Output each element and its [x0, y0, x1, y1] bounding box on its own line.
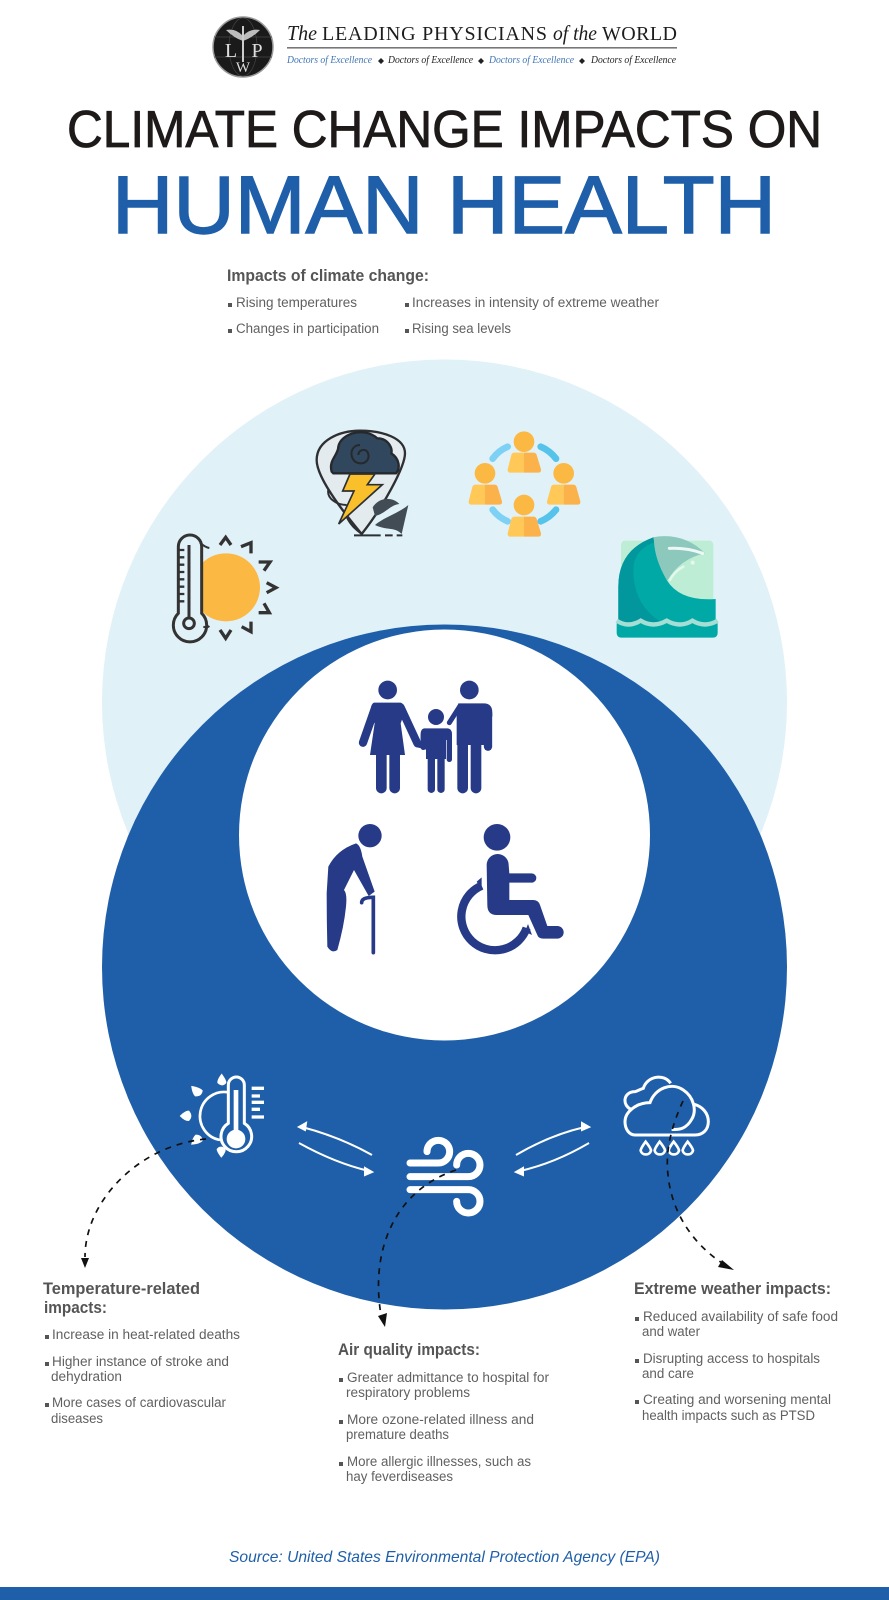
text block: extreme weather impacts: Creating and worsening mental	[643, 1392, 831, 1407]
text block: impacts of climate change: Increases in intensity of extreme weather	[412, 295, 659, 310]
top person	[508, 431, 541, 473]
text block: extreme weather impacts: and water	[642, 1324, 700, 1339]
icon: LPW round emblem	[213, 17, 273, 77]
text block: temperature-related impacts: dehydration	[51, 1369, 122, 1384]
text block: temperature-related impacts: Temperature-related	[43, 1280, 200, 1298]
text block: air quality impacts: Air quality impacts:	[338, 1341, 480, 1359]
tagline row: Doctors of Excellence	[286, 55, 372, 66]
text block: extreme weather impacts: Extreme weather impacts:	[634, 1280, 831, 1298]
icon: LPW round emblem: L	[225, 40, 237, 62]
icon: ocean wave	[617, 536, 718, 638]
text block: temperature-related impacts	[43, 1280, 240, 1426]
text block: air quality impacts: hay feverdiseases	[346, 1469, 453, 1484]
text block: air quality impacts: More ozone-related illness and	[347, 1412, 534, 1427]
text block: extreme weather impacts: and care	[642, 1366, 694, 1381]
source line: Source: United States Environmental Protection Agency (EPA)	[229, 1549, 660, 1566]
text block: air quality impacts: respiratory problems	[346, 1385, 470, 1400]
text block: temperature-related impacts: More cases of cardiovascular	[52, 1395, 226, 1410]
text block: impacts of climate change: Rising sea levels	[412, 321, 511, 336]
text block: temperature-related impacts: impacts:	[44, 1299, 107, 1317]
header logo lockup	[213, 17, 677, 77]
tagline row	[286, 55, 676, 66]
tagline row: Doctors of Excellence	[488, 55, 574, 66]
title: HUMAN HEALTH	[112, 160, 776, 251]
text block: impacts of climate change: Rising temperatures	[236, 295, 357, 310]
title: CLIMATE CHANGE IMPACTS ON	[67, 101, 822, 159]
icon: thermometer and sun	[173, 535, 276, 642]
panel: health impacts blue circle	[102, 624, 787, 1310]
panel: vulnerable groups white circle	[239, 630, 650, 1040]
text block: air quality impacts: premature deaths	[346, 1427, 449, 1442]
arrow: dashed temperature to text	[81, 1139, 206, 1268]
icon: LPW round emblem: W	[236, 60, 251, 76]
text block: impacts of climate change: Changes in participation	[236, 321, 379, 336]
right person	[547, 463, 580, 505]
text block: extreme weather impacts: health impacts such as PTSD	[642, 1408, 815, 1423]
tagline row: Doctors of Excellence	[387, 55, 473, 66]
organisation name: The	[287, 21, 317, 45]
text block: extreme weather impacts: Disrupting access to hospitals	[643, 1351, 820, 1366]
text block: temperature-related impacts: Increase in heat-related deaths	[52, 1327, 240, 1342]
bottom person	[508, 495, 541, 537]
text block: extreme weather impacts: Reduced availability of safe food	[643, 1309, 838, 1324]
text block: air quality impacts: More allergic illnesses, such as	[347, 1454, 531, 1469]
text block: impacts of climate change	[227, 267, 659, 336]
arrow: right pair between wind and rain cloud	[516, 1123, 589, 1175]
left person	[469, 463, 502, 505]
organisation name	[287, 21, 677, 45]
icon: wheelchair user	[461, 824, 564, 950]
text block: air quality impacts: Greater admittance to hospital for	[347, 1370, 550, 1385]
title	[67, 101, 822, 251]
icon: elderly person with cane	[327, 824, 382, 953]
text block: extreme weather impacts	[634, 1280, 838, 1423]
arrow: dashed air quality to text	[378, 1170, 456, 1327]
arrow: left pair between temperature and wind	[299, 1123, 372, 1175]
organisation name: LEADING PHYSICIANS	[322, 23, 547, 45]
icon: family of three	[363, 681, 492, 789]
organisation name: WORLD	[602, 23, 677, 45]
tagline row: Doctors of Excellence	[590, 55, 676, 66]
icon: temperature sun thermometer	[181, 1075, 264, 1157]
icon: rain cloud	[625, 1077, 708, 1154]
text block: temperature-related impacts: diseases	[51, 1411, 103, 1426]
footer bar	[0, 1587, 889, 1600]
text block: impacts of climate change: Impacts of climate change:	[227, 267, 429, 285]
arrow: dashed extreme weather to text	[667, 1101, 734, 1270]
panel: climate impacts light circle	[102, 360, 787, 1044]
text block: air quality impacts	[338, 1341, 550, 1484]
text block: temperature-related impacts: Higher instance of stroke and	[52, 1354, 229, 1369]
icon: LPW round emblem: P	[251, 40, 263, 62]
icon: tornado with lightning	[317, 431, 408, 535]
organisation name: of the	[553, 21, 597, 45]
icon: wind	[410, 1140, 480, 1213]
icon: circle of people	[469, 431, 580, 537]
